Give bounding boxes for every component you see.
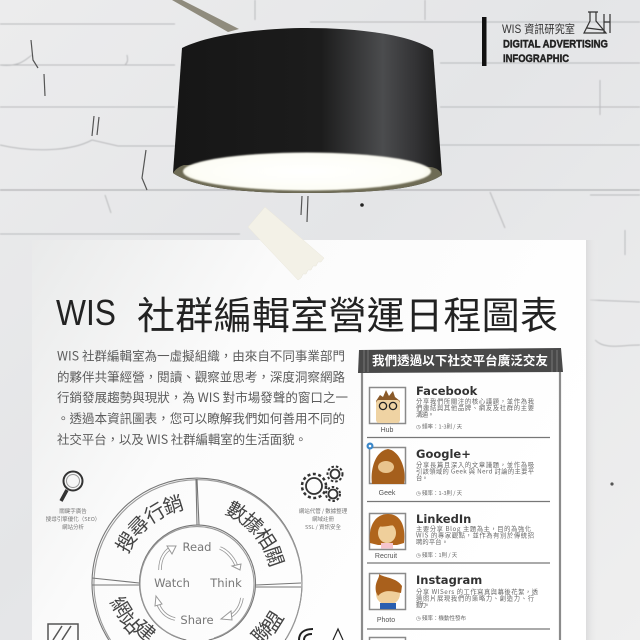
title: WIS bbox=[56, 292, 116, 333]
lamp shade bbox=[173, 28, 442, 193]
icon: flask bbox=[584, 12, 610, 33]
wheel diagram bbox=[92, 478, 302, 640]
wheel segment labels: 銷 bbox=[159, 487, 187, 520]
wheel segment labels: 尋 bbox=[120, 508, 155, 543]
Google+ row: Google+ bbox=[416, 447, 471, 461]
intro paragraph: WIS 社群編輯室為一虛擬組織，由來自不同事業部門 bbox=[57, 346, 345, 364]
Facebook row: 分享我們所關注的核心議題，並作為我 bbox=[416, 396, 535, 406]
panel header bbox=[358, 348, 563, 373]
LinkedIn row: 聘的平台。 bbox=[416, 537, 448, 546]
lamp light bbox=[173, 152, 442, 193]
wheel segment labels: 站 bbox=[114, 605, 148, 639]
avatar: Recruit bbox=[370, 514, 406, 550]
caption: data services: 網站代管 / 數據整理 bbox=[299, 507, 348, 515]
wheel segment labels: 盟 bbox=[254, 605, 290, 637]
Instagram row: Instagram bbox=[416, 573, 482, 587]
intro paragraph: 。透過本資訊圖表，您可以瞭解我們如何善用不同的 bbox=[57, 408, 345, 427]
wheel segment labels: 數 bbox=[221, 493, 253, 528]
wheel segment labels: 據 bbox=[236, 505, 271, 540]
intro paragraph bbox=[57, 346, 348, 448]
logo text bbox=[502, 22, 608, 65]
wheel segment labels bbox=[104, 487, 292, 640]
next avatar frame bbox=[370, 638, 406, 640]
LinkedIn row: LinkedIn bbox=[416, 512, 471, 526]
icon: gears bbox=[302, 466, 342, 501]
logo text: WIS 資訊研究室 bbox=[502, 22, 575, 36]
wheel inner labels: Watch bbox=[154, 576, 190, 590]
caption: search services bbox=[46, 507, 100, 531]
Instagram row bbox=[370, 573, 539, 624]
wheel segment labels: 行 bbox=[138, 494, 170, 529]
wheel segment labels: 關 bbox=[259, 542, 292, 570]
Instagram row: 分享 WISers 的工作寫真與幕後花絮，透 bbox=[416, 587, 539, 596]
icon: magnifier bbox=[61, 472, 82, 501]
caption: data services bbox=[299, 507, 348, 531]
Google+ row: 引該領域的 Geek 與 Nerd 討論的主要平 bbox=[416, 466, 534, 476]
title: 社群編輯室營運日程圖表 bbox=[137, 285, 558, 340]
wheel segment labels: 網 bbox=[104, 590, 140, 622]
logo text: DIGITAL ADVERTISING bbox=[503, 38, 608, 50]
LinkedIn row bbox=[370, 512, 534, 560]
intro paragraph: 社交平台，以及 WIS 社群編輯室的生活面貌。 bbox=[57, 429, 307, 448]
caption: data services: 網域註冊 bbox=[312, 515, 334, 523]
Instagram row: 過照片展現我們的策略力、創造力、行 bbox=[416, 594, 535, 602]
wheel inner labels bbox=[154, 540, 242, 627]
wheel inner labels: Think bbox=[209, 576, 242, 590]
intro paragraph: 行銷發展趨勢與現狀，為 WIS 對市場發聲的窗口之一 bbox=[57, 387, 348, 406]
caption: search services: 搜尋引擎優化（SEO） bbox=[46, 515, 100, 523]
paper sheet bbox=[32, 240, 586, 640]
wheel cycle arrows bbox=[155, 546, 242, 620]
Facebook row: 們連結與其他品牌、網友及社群的主要 bbox=[416, 403, 534, 412]
intro paragraph: 的夥伴共筆經營，閱讀、觀察並思考，深度洞察網路 bbox=[57, 366, 345, 386]
Instagram row: Photo bbox=[377, 617, 395, 624]
Google+ row: ◷ 頻率：1-3則 / 天 bbox=[416, 489, 463, 497]
panel frame bbox=[362, 372, 560, 640]
icon: window frame bbox=[48, 624, 78, 640]
avatar: Hub bbox=[370, 388, 406, 424]
panel header: 我們透過以下社交平台廣泛交友 bbox=[372, 350, 548, 369]
lamp arm bbox=[172, 0, 239, 32]
Facebook row bbox=[370, 384, 535, 434]
LinkedIn row: WIS 的專家觀點，並作為有別於傳統招 bbox=[416, 530, 534, 540]
Facebook row: 溝通。 bbox=[416, 410, 434, 418]
Google+ row: Geek bbox=[379, 490, 396, 497]
wheel segment labels: 相 bbox=[249, 522, 284, 554]
Facebook row: ◷ 頻率：1-3則 / 天 bbox=[416, 422, 463, 430]
LinkedIn row: 主要分享 Blog 主題為主，目的為強化 bbox=[416, 524, 531, 533]
wheel rings and spokes bbox=[92, 478, 302, 640]
wheel inner labels: Read bbox=[183, 540, 211, 554]
caption: data services: SSL / 資訊安全 bbox=[305, 523, 342, 531]
Facebook row: Facebook bbox=[416, 384, 478, 398]
avatar: Photo bbox=[370, 574, 406, 610]
caption: search services: 網站分析 bbox=[62, 523, 84, 531]
Google+ row: 分享長篇且深入的文章議題，並作為吸 bbox=[416, 460, 535, 469]
LinkedIn row: ◷ 頻率：1則 / 天 bbox=[416, 551, 458, 559]
wheel segment labels: 搜 bbox=[107, 526, 143, 557]
Instagram row: ◷ 頻率：機動性發布 bbox=[416, 614, 467, 622]
wheel inner labels: Share bbox=[180, 613, 214, 627]
icon: signal waves bbox=[299, 629, 343, 640]
LinkedIn row: Recruit bbox=[375, 553, 397, 560]
caption: search services: 關鍵字廣告 bbox=[59, 507, 87, 515]
Google+ row: 台。 bbox=[416, 473, 428, 482]
lamp bbox=[172, 0, 442, 193]
logo bbox=[482, 12, 610, 66]
logo text: INFOGRAPHIC bbox=[503, 53, 569, 65]
panel: social platforms bbox=[358, 348, 563, 640]
avatar: Geek bbox=[366, 442, 406, 484]
Google+ row bbox=[366, 442, 535, 497]
Instagram row: 動力。 bbox=[416, 600, 430, 609]
tape bbox=[248, 207, 324, 280]
Facebook row: Hub bbox=[381, 427, 394, 434]
